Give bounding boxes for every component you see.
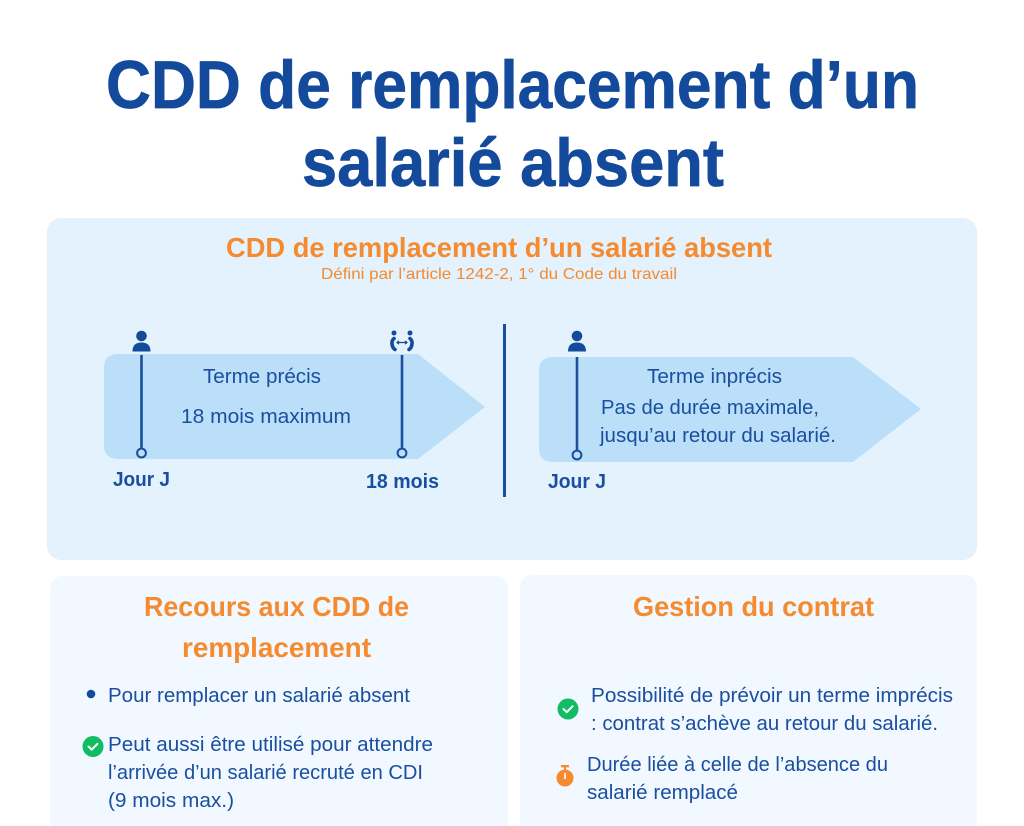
icon: person bbox=[132, 331, 150, 352]
text: other use: (9 mois max.) bbox=[108, 790, 234, 812]
divider bbox=[503, 324, 506, 497]
text: open term label: Terme inprécis bbox=[647, 366, 782, 388]
panel subtitle: Défini par l’article 1242-2, 1° du Code du travail bbox=[321, 266, 677, 283]
title: salarié absent bbox=[302, 125, 724, 201]
text: other use: l’arrivée d’un salarié recruté en CDI bbox=[108, 762, 423, 784]
icon: person bbox=[568, 331, 586, 352]
icon: orange stopwatch bbox=[556, 765, 574, 786]
icon: green check bbox=[82, 736, 104, 757]
panel heading: CDD de remplacement d’un salarié absent bbox=[226, 232, 772, 263]
text: open term option: Possibilité de prévoir un terme imprécis bbox=[591, 685, 953, 707]
text: fixed term duration: 18 mois maximum bbox=[181, 406, 351, 428]
text: open term description: Pas de durée maximale, bbox=[601, 397, 819, 419]
label: 18 months: 18 mois bbox=[366, 471, 439, 493]
text: duration bbox=[587, 754, 888, 804]
label: day J: Jour J bbox=[113, 469, 170, 491]
icon: bullet bbox=[87, 690, 95, 698]
icon: two people exchanging bbox=[392, 330, 412, 350]
text: fixed term label: Terme précis bbox=[203, 366, 321, 388]
text: other use: Peut aussi être utilisé pour attendre bbox=[108, 734, 433, 756]
title: CDD de remplacement d’un bbox=[106, 47, 919, 123]
label: day J: Jour J bbox=[548, 471, 606, 493]
text: open term option: : contrat s’achève au retour du salarié. bbox=[591, 713, 938, 735]
text: duration: salarié remplacé bbox=[587, 782, 738, 804]
panel: recourse bbox=[50, 576, 508, 826]
title bbox=[106, 47, 919, 201]
marker: end of fixed term bbox=[398, 355, 406, 457]
marker: start of open term bbox=[573, 357, 581, 459]
text: duration: Durée liée à celle de l’absence du bbox=[587, 754, 888, 776]
text: other use bbox=[108, 734, 433, 812]
text: open term option bbox=[591, 685, 953, 735]
text: open term description bbox=[599, 397, 836, 447]
text: open term description: jusqu’au retour du salarié. bbox=[599, 425, 836, 447]
arrow: open term bbox=[539, 357, 921, 462]
panel heading bbox=[144, 591, 409, 663]
panel: definition timeline bbox=[47, 218, 977, 560]
panel heading: Gestion du contrat bbox=[633, 591, 874, 622]
panel: contract management bbox=[520, 575, 977, 826]
arrow: fixed term bbox=[104, 354, 485, 459]
panel heading: remplacement bbox=[182, 632, 371, 663]
icon: green check bbox=[558, 698, 578, 720]
text: main use: Pour remplacer un salarié absent bbox=[108, 685, 410, 707]
panel heading: Recours aux CDD de bbox=[144, 591, 409, 622]
marker: start of fixed term bbox=[137, 355, 146, 457]
